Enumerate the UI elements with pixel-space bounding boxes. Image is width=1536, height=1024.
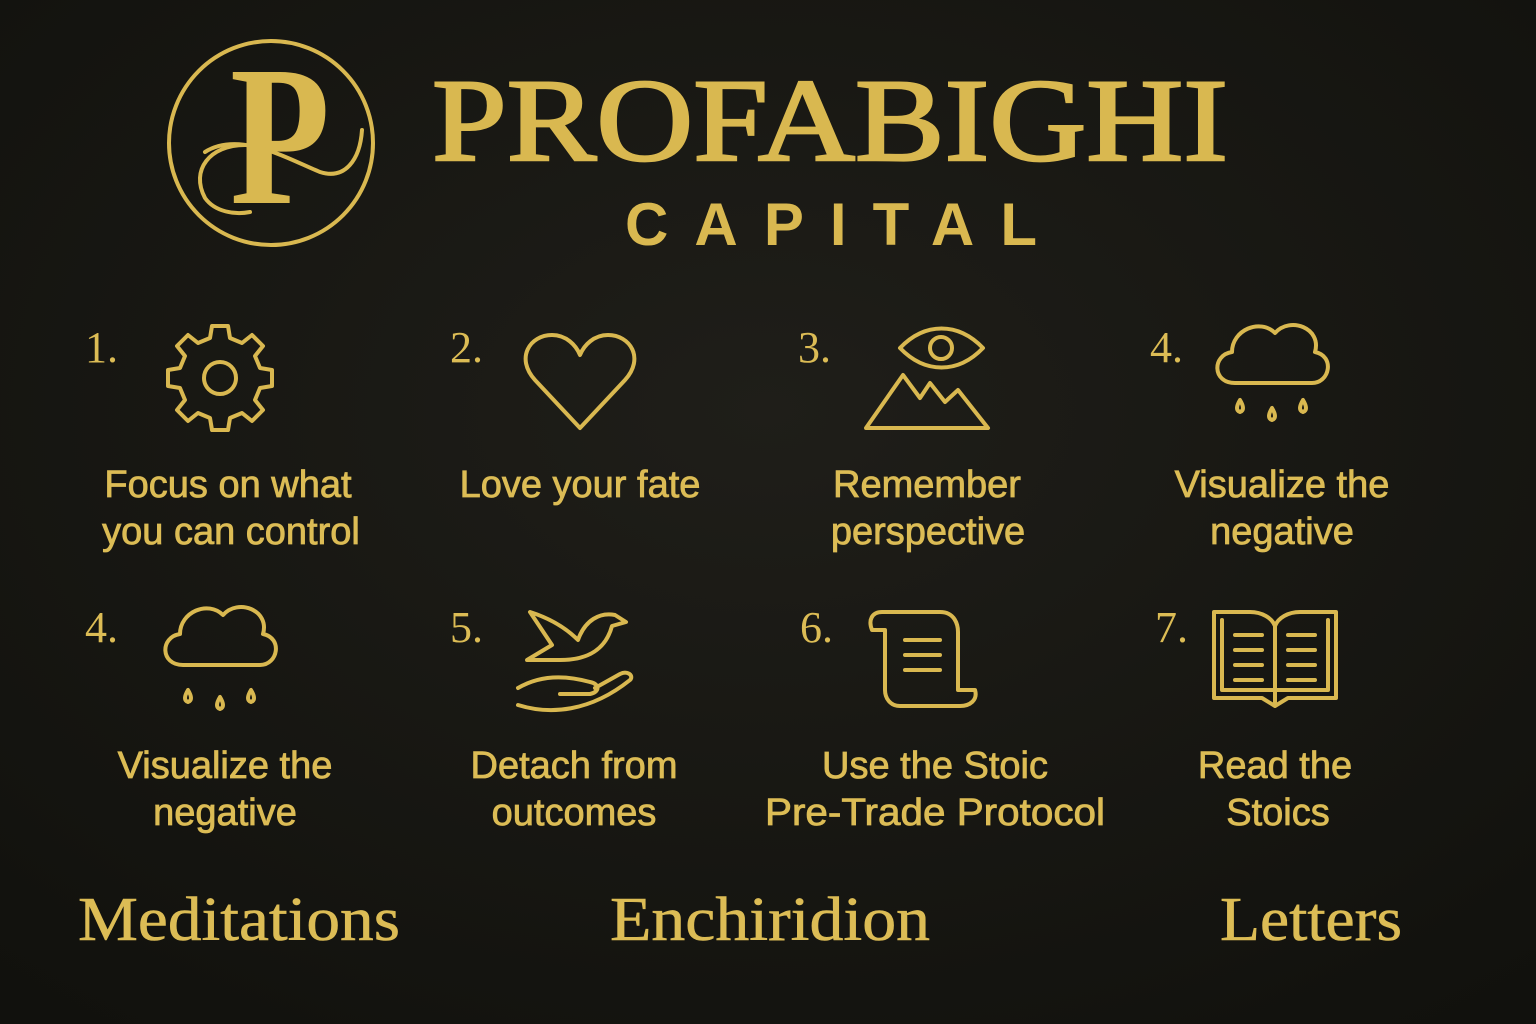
item 1: Focus on what <box>104 464 352 506</box>
item 4 top <box>1150 323 1389 553</box>
item 7 <box>1155 603 1352 834</box>
item 4 bottom: negative <box>153 792 297 834</box>
item 4 bottom: 4. <box>85 603 118 652</box>
item 6 <box>765 603 1105 834</box>
bottom: Letters: Letters <box>1220 886 1402 954</box>
item 5: outcomes <box>492 792 656 834</box>
item 6: Use the Stoic <box>822 745 1048 787</box>
title: PROFABIGHI <box>432 55 1228 186</box>
item 4 top: 4. <box>1150 323 1183 372</box>
logo emblem: P <box>230 26 330 247</box>
item 7: Read the <box>1198 745 1352 787</box>
item 4 top: Visualize the <box>1175 464 1389 506</box>
item 1: you can control <box>102 511 360 553</box>
item 5: Detach from <box>471 745 677 787</box>
logo emblem <box>169 26 373 247</box>
item 1 <box>85 323 360 553</box>
item 3 <box>798 323 1025 553</box>
item 3: 3. <box>798 323 831 372</box>
item 1: 1. <box>85 323 118 372</box>
bottom: Enchiridion: Enchiridion <box>610 886 930 954</box>
item 7: Stoics <box>1226 792 1330 834</box>
item 4 bottom: Visualize the <box>118 745 332 787</box>
item 4 top: negative <box>1210 511 1354 553</box>
item 3: Remember <box>833 464 1021 506</box>
item 2: 2. <box>450 323 483 372</box>
subtitle: CAPITAL <box>625 191 1037 258</box>
item 5 <box>450 603 677 834</box>
item 6: Pre-Trade Protocol <box>765 792 1105 834</box>
item 2: Love your fate <box>460 464 700 506</box>
bottom: Meditations: Meditations <box>78 886 400 954</box>
item 2 <box>450 323 700 506</box>
item 5: 5. <box>450 603 483 652</box>
item 3: perspective <box>831 511 1025 553</box>
item 4 bottom <box>85 603 332 834</box>
item 7: 7. <box>1155 603 1188 652</box>
item 6: 6. <box>800 603 833 652</box>
